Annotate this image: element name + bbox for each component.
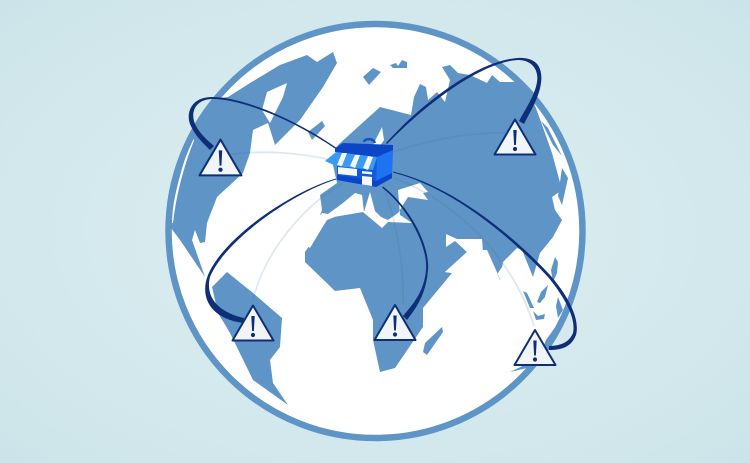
continents — [160, 52, 568, 405]
shop base — [337, 173, 392, 187]
Hudson Bay — [262, 83, 287, 123]
Arctic streak — [541, 121, 562, 156]
South America — [212, 272, 288, 405]
warning icon: Asia — [494, 120, 536, 154]
faint route arcs — [225, 133, 534, 326]
arc to Africa warning — [382, 186, 428, 320]
Baltic inlet — [373, 127, 384, 144]
Japan — [551, 257, 558, 282]
Indian Ocean — [445, 234, 502, 279]
Africa — [305, 205, 467, 372]
Eurasia — [320, 65, 562, 280]
shop side — [376, 150, 393, 187]
arc to Asia warning — [386, 58, 541, 144]
shop handle — [364, 139, 375, 143]
Caribbean island — [308, 121, 325, 140]
shop roof — [335, 143, 393, 157]
Madagascar — [423, 327, 443, 355]
East Pacific slivers — [558, 168, 568, 205]
risk route arcs — [189, 58, 577, 350]
Java — [533, 311, 545, 320]
faint arc to Oceania — [395, 178, 534, 326]
faint arc to Africa — [385, 190, 403, 305]
warning icon: North America — [200, 140, 241, 175]
awning — [325, 152, 377, 170]
shop door — [362, 176, 372, 186]
shop window — [338, 167, 357, 176]
shop front — [337, 155, 377, 187]
Sumatra — [523, 291, 534, 308]
warning icon: Africa — [374, 305, 416, 340]
globe disc — [168, 24, 582, 438]
arc to South America warning — [205, 178, 336, 323]
Australia edge — [510, 326, 558, 372]
Iceland islands — [390, 60, 407, 68]
arc to North America warning — [189, 97, 336, 150]
warning icon: Oceania — [514, 330, 556, 365]
Philippines — [556, 297, 563, 318]
white coastal slivers — [172, 78, 252, 222]
faint arc to South America — [253, 184, 342, 300]
globe ring — [168, 24, 582, 438]
shop sign panel — [362, 171, 372, 174]
globe — [160, 24, 582, 438]
icon: shop — [325, 139, 393, 187]
North America — [160, 52, 337, 277]
arc to Oceania warning — [393, 172, 577, 350]
Mediterranean — [300, 183, 428, 248]
warning icon: South America — [232, 306, 274, 340]
Borneo — [537, 285, 548, 303]
faint arc to Asia — [393, 133, 505, 152]
Greenland-side island — [363, 68, 381, 85]
faint arc to North America — [225, 152, 335, 161]
